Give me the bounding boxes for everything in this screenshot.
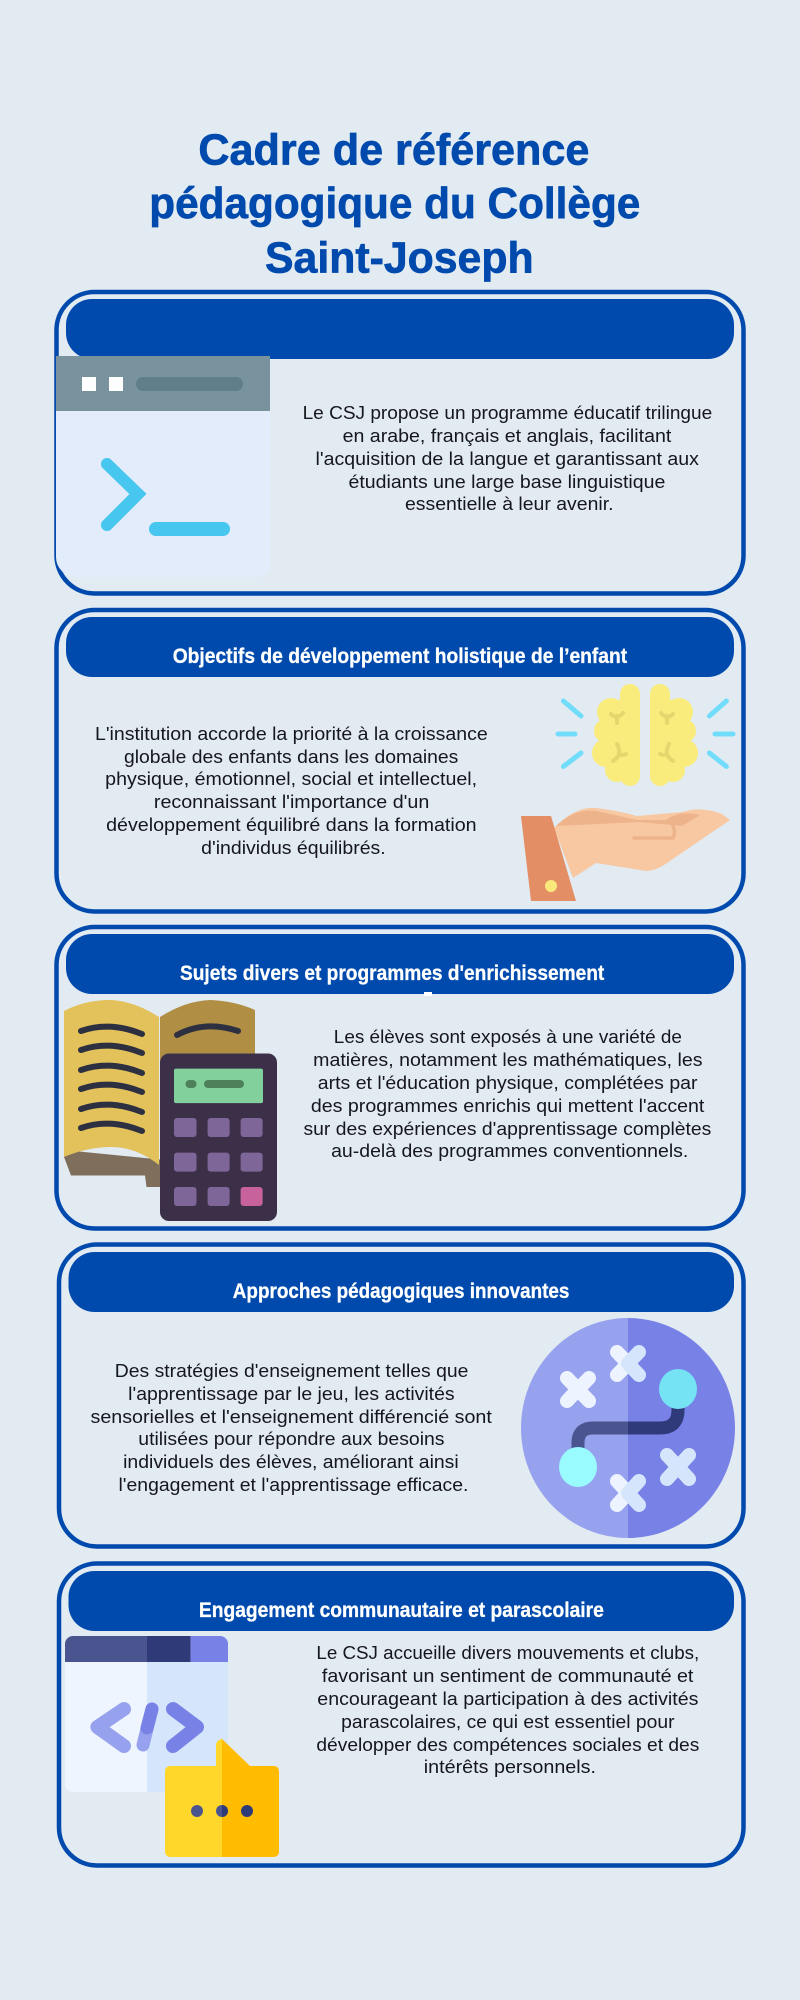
text block: individuels des élèves, améliorant ainsi <box>123 1451 459 1472</box>
heading: Engagement communautaire et parascolaire <box>199 1599 604 1622</box>
text block: Des stratégies d'enseignement telles que <box>115 1360 468 1381</box>
text block: étudiants une large base linguistique <box>348 471 665 492</box>
text block: intérêts personnels. <box>424 1756 596 1777</box>
title: Cadre de référence <box>198 126 589 174</box>
icon: book and calculator <box>64 1000 277 1221</box>
panel frame <box>56 610 744 912</box>
text block: l'engagement et l'apprentissage efficace. <box>118 1474 468 1495</box>
header bar <box>66 299 734 359</box>
text block: sur des expériences d'apprentissage complètes <box>304 1118 711 1139</box>
text block: développer des compétences sociales et des <box>316 1734 699 1755</box>
text block: en arabe, français et anglais, facilitant <box>343 425 671 446</box>
text block: des programmes enrichis qui mettent l'accent <box>311 1095 704 1116</box>
header bar <box>66 934 734 994</box>
text block: sensorielles et l'enseignement différencié sont <box>90 1406 492 1427</box>
panel frame <box>56 292 744 594</box>
header bar <box>68 1571 734 1631</box>
text block <box>90 1360 492 1495</box>
text block <box>95 723 488 858</box>
text block: développement équilibré dans la formation <box>106 814 477 835</box>
text block: globale des enfants dans les domaines <box>124 746 458 767</box>
text block: essentielle à leur avenir. <box>405 493 614 514</box>
header bar <box>68 1252 734 1312</box>
text block: l'apprentissage par le jeu, les activités <box>128 1383 455 1404</box>
heading: Sujets divers et programmes d'enrichissement <box>180 962 604 985</box>
icon: brain over hand <box>521 684 733 901</box>
text block: Les élèves sont exposés à une variété de <box>334 1026 682 1047</box>
text block: utilisées pour répondre aux besoins <box>138 1428 445 1449</box>
text block: au-delà des programmes conventionnels. <box>331 1140 688 1161</box>
text block: physique, émotionnel, social et intellectuel, <box>105 768 477 789</box>
panel: sujets divers <box>56 927 744 1228</box>
text block: encourageant la participation à des activités <box>317 1688 698 1709</box>
heading: Objectifs de développement holistique de l’enfant <box>173 645 627 668</box>
text block <box>304 1026 711 1161</box>
text block: d'individus équilibrés. <box>201 837 386 858</box>
title <box>149 126 640 282</box>
icon: strategy board <box>521 1318 735 1538</box>
panel frame <box>59 1244 744 1546</box>
panel frame <box>56 927 744 1228</box>
text block: parascolaires, ce qui est essentiel pour <box>341 1711 674 1732</box>
title: pédagogique du Collège <box>149 179 640 228</box>
title: Saint-Joseph <box>265 234 534 282</box>
header bar <box>66 617 734 677</box>
heading: Approches pédagogiques innovantes <box>233 1280 569 1303</box>
panel: engagement communautaire <box>59 1564 744 1866</box>
icon: code window with chat bubble <box>65 1636 279 1857</box>
panel: développement holistique <box>56 610 744 912</box>
panel: programme trilingue <box>56 292 744 594</box>
text block: L'institution accorde la priorité à la croissance <box>95 723 488 744</box>
text block: arts et l'éducation physique, complétées par <box>318 1072 698 1093</box>
text block: reconnaissant l'importance d'un <box>154 791 429 812</box>
text block <box>316 1642 699 1777</box>
panel: approches innovantes <box>59 1244 744 1546</box>
icon: terminal window <box>56 356 270 577</box>
panel frame <box>59 1564 744 1866</box>
text block: Le CSJ accueille divers mouvements et clubs, <box>316 1642 699 1663</box>
text block: Le CSJ propose un programme éducatif trilingue <box>303 402 712 423</box>
text block: matières, notamment les mathématiques, les <box>313 1049 702 1070</box>
text block: l'acquisition de la langue et garantissant aux <box>316 448 700 469</box>
text block: favorisant un sentiment de communauté et <box>322 1665 693 1686</box>
text block <box>303 402 712 514</box>
